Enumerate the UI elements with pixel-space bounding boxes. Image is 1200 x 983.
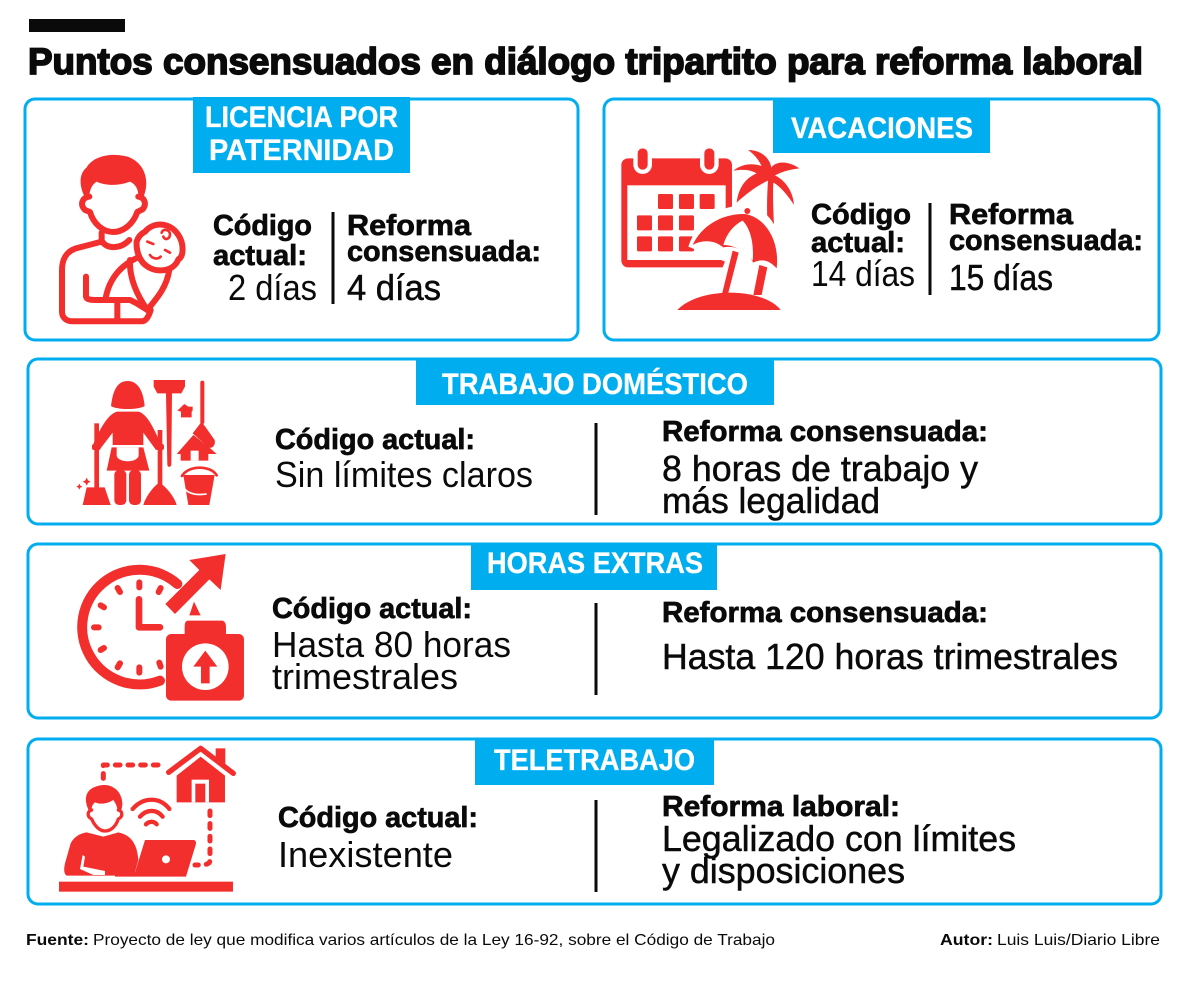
text: reforma laboral (662, 791, 1016, 891)
heading: teletrabajo (475, 738, 714, 785)
icon: father holding baby (62, 155, 183, 321)
text: reforma laboral: Reforma laboral: (662, 791, 900, 823)
text: código actual (811, 199, 915, 294)
heading: horas extras: HORAS EXTRAS (487, 547, 703, 580)
text: código actual: actual: (213, 240, 307, 272)
heading: vacaciones: VACACIONES (791, 112, 973, 145)
text: reforma consensuada: consensuada: (949, 225, 1143, 257)
header accent bar (29, 19, 125, 32)
text: reforma consensuada (347, 210, 541, 308)
panel: vacaciones (604, 99, 1159, 340)
text: reforma consensuada: Reforma (949, 199, 1074, 231)
text: código actual: Código (811, 199, 911, 231)
heading: teletrabajo: TELETRABAJO (494, 744, 695, 777)
author credit (940, 932, 1160, 949)
heading: licencia por paternidad: PATERNIDAD (209, 134, 394, 167)
text: código actual: 2 días (228, 267, 317, 308)
text: código actual: Código actual: (278, 802, 478, 834)
source note: Fuente: (26, 932, 89, 949)
heading: licencia por paternidad: LICENCIA POR (205, 101, 398, 134)
text: reforma consensuada: consensuada: (347, 236, 541, 268)
text: reforma consensuada: 8 horas de trabajo y (662, 448, 978, 489)
text: código actual: Código (213, 210, 312, 242)
icon: domestic worker with cleaning tools (76, 380, 217, 505)
icon: clock, arrow and briefcase (82, 554, 244, 701)
icon: calendar, palm and beach umbrella (621, 148, 799, 310)
panel: licencia por paternidad (25, 97, 578, 340)
text: reforma laboral: y disposiciones (662, 850, 905, 891)
text: reforma laboral: Legalizado con límites (662, 818, 1016, 859)
text: código actual: Inexistente (278, 834, 453, 875)
text: reforma consensuada (662, 416, 988, 521)
heading: horas extras (471, 544, 717, 590)
text: código actual (275, 424, 533, 495)
author credit: Luis Luis/Diario Libre (997, 932, 1160, 949)
text: reforma consensuada: Reforma consensuada: (662, 597, 988, 629)
text: código actual: Código actual: (275, 424, 475, 456)
heading: vacaciones (773, 100, 990, 153)
text: reforma consensuada: 4 días (347, 267, 441, 308)
text: reforma consensuada: Hasta 120 horas trimestrales (662, 636, 1118, 677)
text: reforma consensuada: 15 días (949, 257, 1053, 298)
text: reforma consensuada: Reforma (347, 210, 472, 242)
text: reforma consensuada: Reforma consensuada: (662, 416, 988, 448)
text: código actual (213, 210, 317, 308)
text: código actual (272, 593, 511, 697)
text: código actual: Código actual: (272, 593, 472, 625)
text: código actual: 14 días (811, 253, 915, 294)
heading: licencia por paternidad (193, 97, 410, 173)
text: código actual (278, 802, 478, 875)
text: código actual: Sin límites claros (275, 454, 533, 495)
text: reforma consensuada (949, 199, 1143, 298)
title: Puntos consensuados en diálogo tripartito para reforma laboral (28, 41, 1143, 82)
text: código actual: actual: (811, 227, 905, 259)
text: código actual: trimestrales (272, 656, 458, 697)
text: código actual: Hasta 80 horas (272, 624, 511, 665)
icon: person with laptop connected to home (59, 748, 233, 892)
author credit: Autor: (940, 932, 993, 949)
panel: teletrabajo (28, 738, 1161, 904)
panel: horas extras (28, 544, 1161, 718)
heading: trabajo doméstico (416, 358, 774, 405)
text: reforma consensuada: más legalidad (662, 480, 880, 521)
source note: Proyecto de ley que modifica varios artículos de la Ley 16-92, sobre el Código de Trabajo (93, 932, 775, 949)
text: reforma consensuada (662, 597, 1118, 677)
heading: trabajo doméstico: TRABAJO DOMÉSTICO (442, 367, 748, 401)
panel: trabajo doméstico (28, 358, 1161, 524)
